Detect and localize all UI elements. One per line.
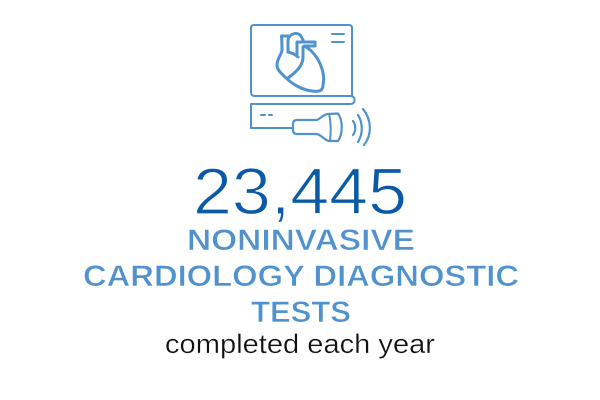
heading: noninvasive cardiology diagnostic tests	[83, 224, 519, 329]
icon: ultrasound machine with heart	[251, 25, 370, 145]
icon: ultrasound probe	[293, 114, 342, 141]
heading line 3: TESTS	[251, 296, 351, 329]
icon: monitor and console outline	[251, 25, 354, 128]
icon: monitor text lines	[332, 34, 344, 42]
caption: completed each year	[165, 329, 435, 359]
heading line 2: CARDIOLOGY DIAGNOSTIC	[83, 260, 519, 293]
big number: 23,445	[193, 154, 407, 228]
icon: sound waves	[353, 109, 370, 145]
icon: heart	[277, 33, 324, 91]
icon: console dashes	[261, 114, 272, 116]
heading line 1: NONINVASIVE	[187, 224, 415, 257]
